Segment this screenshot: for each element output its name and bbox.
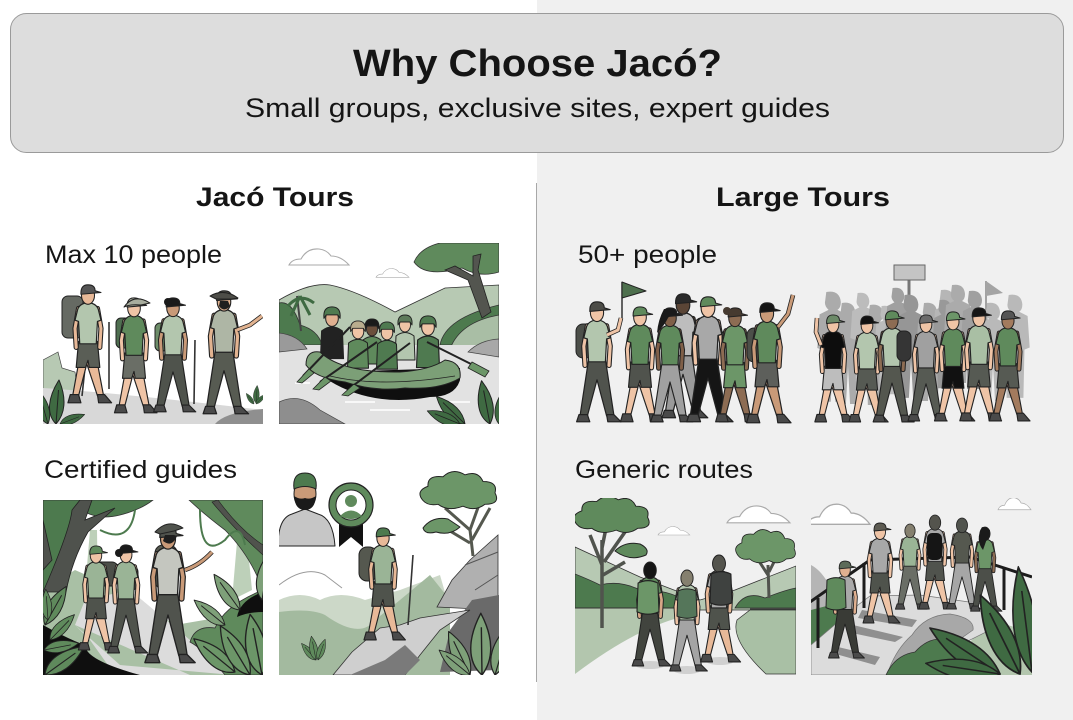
label: Max 10 people: Max 10 people <box>45 241 222 269</box>
oars <box>297 327 489 396</box>
illustration: large group walking with flag <box>576 282 793 423</box>
subtitle: Small groups, exclusive sites, expert guides <box>245 93 830 123</box>
icon: guide portrait <box>278 473 335 546</box>
clouds <box>807 498 1031 524</box>
clouds <box>289 249 409 277</box>
illustration: whitewater raft <box>279 243 499 424</box>
illustration: four hikers with guide <box>43 284 263 424</box>
illustration: hikers on generic park path <box>575 498 796 674</box>
trees <box>574 496 795 628</box>
label: 50+ people: 50+ people <box>578 241 717 269</box>
tree <box>420 471 497 556</box>
title: Why Choose Jacó? <box>353 43 722 85</box>
icon: certification badge <box>329 483 373 547</box>
header panel <box>10 14 1064 152</box>
divider <box>536 183 538 682</box>
heading: Large Tours: Large Tours <box>716 182 890 212</box>
label: Certified guides: Certified guides <box>44 456 237 484</box>
rowers <box>320 307 440 369</box>
illustration: guide leading forest trek <box>43 500 263 675</box>
background: left half <box>0 0 537 720</box>
illustration: crowd with sign and flag <box>815 265 1030 422</box>
background: right half <box>537 0 1073 720</box>
sign <box>894 265 925 310</box>
illustration: certified guide on rocky climb <box>279 471 499 675</box>
raft <box>306 352 460 400</box>
flag <box>986 281 1003 310</box>
illustration: group at railing overlook <box>811 498 1032 675</box>
heading: Jacó Tours: Jacó Tours <box>196 182 354 212</box>
label: Generic routes: Generic routes <box>575 456 753 484</box>
clouds <box>658 506 790 535</box>
